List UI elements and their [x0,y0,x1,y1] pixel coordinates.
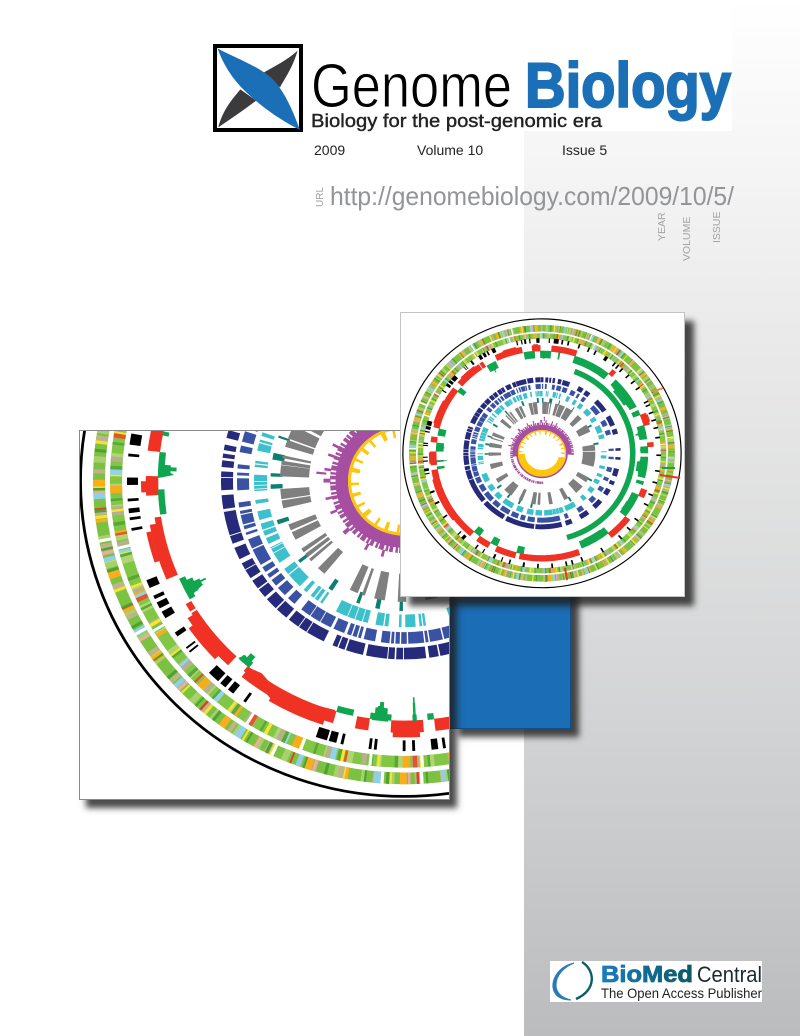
ring: outer gene categories [99,184,709,778]
ring: grey genes [294,374,514,588]
ring: outer gene categories (small) [408,324,676,583]
url: http://genomebiology.com/2009/10/5/ [330,181,735,211]
chart: enlarged circular genome map [80,431,449,798]
ring: mid blue genes [243,324,565,638]
ring: yellow histogram [350,428,458,534]
ring: teal genes [276,357,532,605]
outer circle [80,166,728,796]
icon: journal logo square [215,46,301,130]
panel: full genome wheel [400,312,685,597]
highlighted loci marks [565,388,680,580]
ring: black gene ticks [132,216,676,746]
BioMed wordmark: BioMed [601,961,693,987]
ring: purple histogram [321,400,487,562]
red track detail [247,667,335,720]
ring: red above-average GC skew [144,227,664,735]
ring: inner gene categories [116,200,692,762]
issue details: volume: Volume 10 [417,142,483,158]
tagline: Biology for the post-genomic era [311,111,603,131]
ring: green below-average GC skew [161,244,647,718]
title: Genome: Genome [311,52,512,121]
publisher logo: BioMed Central [550,961,762,1002]
masthead [213,44,735,261]
year caption: YEAR [656,212,668,241]
icon: circular swoosh [553,962,592,1000]
title: Biology: Biology [525,51,731,121]
ring: dark blue genes [227,308,581,654]
issue details: year: 2009 [314,142,345,158]
panel: enlarged genome wheel quadrant [79,430,450,800]
ring: bolder red and green tracks (small) [429,345,655,562]
green track teeth [158,467,388,722]
wheel tracks [398,314,686,592]
url caption: URL [315,187,326,207]
panel: blue square [449,500,570,728]
issue caption: ISSUE [711,211,723,243]
panel: grey gradient column [524,0,800,1036]
ring: cyan genes [260,341,548,621]
ring: long green arc [193,275,615,687]
ring: inner gene categories (small) [416,332,668,575]
volume caption: VOLUME [681,217,693,261]
chart: full circular genome map [402,318,682,588]
issue details: issue: Issue 5 [562,142,607,158]
